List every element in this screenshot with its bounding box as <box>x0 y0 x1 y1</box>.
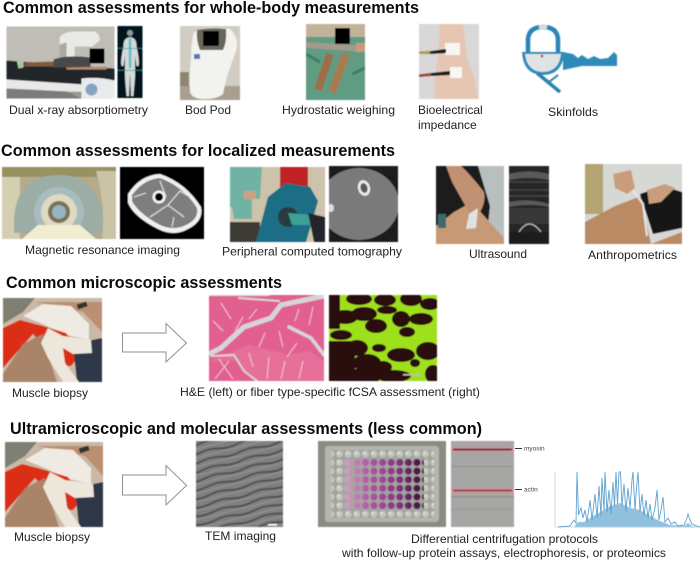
label: bioelectrical impedance: Bioelectrical <box>418 103 483 117</box>
panel: ultramicroscopic and molecular assessments <box>4 440 700 560</box>
label: bioelectrical impedance: impedance <box>418 118 477 132</box>
image: fiber type fluorescence <box>329 292 441 383</box>
label: differential centrifugation: Differential centrifugation protocols <box>411 532 598 546</box>
label: peripheral CT: Peripheral computed tomography <box>222 244 402 258</box>
label: myosin band: myosin <box>524 446 545 452</box>
label: myosin band <box>515 446 545 452</box>
label: ultrasound: Ultrasound <box>469 247 527 261</box>
label: TEM imaging: TEM imaging <box>205 529 276 543</box>
label: actin band <box>515 486 538 494</box>
image: MRI thigh cross-section <box>120 167 204 239</box>
photo: MRI scanner <box>2 167 116 239</box>
arrow: biopsy to histology <box>122 324 186 362</box>
photo: muscle biopsy <box>5 442 103 527</box>
photo: bioelectrical impedance electrodes <box>419 24 479 99</box>
label: anthropometrics: Anthropometrics <box>588 248 677 262</box>
label: dual x-ray: Dual x-ray absorptiometry <box>9 103 148 117</box>
photo: Bod Pod <box>180 26 240 100</box>
label: MRI: Magnetic resonance imaging <box>25 243 180 257</box>
title: localized measurements: Common assessments for localized measurements <box>1 141 395 160</box>
label: muscle biopsy: Muscle biopsy <box>14 530 90 544</box>
title: microscopic assessments: Common microscopic assessments <box>6 273 282 292</box>
label: differential centrifugation: with follow-up protein assays, electrophoresis, or proteomics <box>341 546 666 560</box>
panel: localized measurements <box>2 164 682 262</box>
photo: ultrasound probe on thigh <box>436 166 504 244</box>
image: TEM micrograph <box>166 411 316 561</box>
image: protein assay well plate <box>318 441 446 527</box>
label: Bod Pod: Bod Pod <box>185 103 231 117</box>
panel: microscopic assessments <box>3 292 480 400</box>
title: ultramicroscopic and molecular assessments: Ultramicroscopic and molecular assessments (less common) <box>10 419 482 438</box>
label: hydrostatic weighing: Hydrostatic weighing <box>282 103 395 117</box>
image: electrophoresis gel <box>451 441 514 527</box>
image: ultrasound scan <box>509 166 549 244</box>
photo: peripheral CT device <box>230 167 325 242</box>
image: peripheral CT scan <box>319 166 399 242</box>
icon: skinfold caliper <box>522 25 617 92</box>
label: actin band: actin <box>524 486 538 494</box>
photo: anthropometric thigh tape <box>585 164 682 244</box>
arrow: biopsy to TEM <box>122 466 186 505</box>
image: DXA body scan <box>118 26 142 98</box>
label: muscle biopsy: Muscle biopsy <box>12 386 88 400</box>
label: skinfolds: Skinfolds <box>548 105 598 119</box>
image: H&E stain <box>209 295 324 381</box>
label: histology assessments: H&E (left) or fiber type-specific fCSA assessment (right) <box>180 385 480 399</box>
photo: muscle biopsy <box>3 298 102 382</box>
photo: hydrostatic weighing <box>306 24 365 100</box>
chart: proteomics spectrum <box>555 472 700 527</box>
photo: dual x-ray scanner <box>6 26 114 98</box>
panel: whole-body measurements <box>6 24 617 132</box>
